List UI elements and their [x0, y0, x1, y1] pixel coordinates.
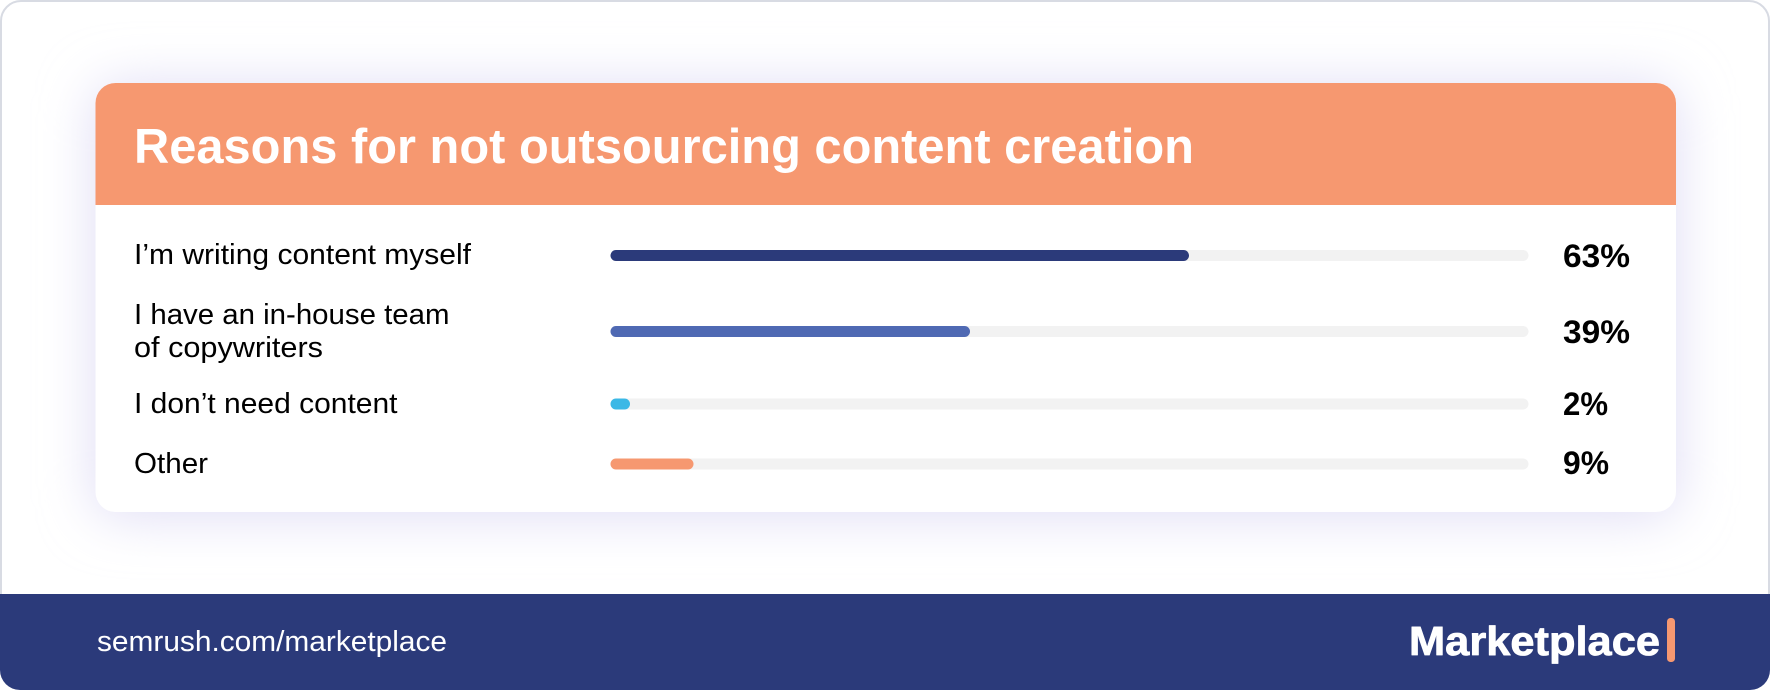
row: writing content myself: 63% — [1563, 238, 1630, 274]
footer band — [0, 594, 1770, 690]
panel: survey card — [96, 83, 1676, 512]
row: writing content myself — [134, 238, 1630, 274]
card shadow — [96, 86, 1676, 515]
header band — [96, 83, 1676, 205]
row: in-house team of copywriters: I have an in-house team — [134, 299, 450, 331]
row: in-house team of copywriters: 39% — [1563, 314, 1630, 350]
row: in-house team of copywriters — [134, 299, 1630, 364]
row: don't need content: 2% — [1563, 386, 1608, 422]
row: other — [134, 445, 1609, 481]
row: other: 9% — [1563, 445, 1609, 481]
footer url: semrush.com/marketplace — [97, 626, 447, 658]
row: don't need content — [134, 386, 1608, 422]
row: writing content myself: I’m writing content myself — [134, 239, 472, 271]
title: Reasons for not outsourcing content creation — [134, 120, 1194, 174]
brand logo: Marketplace: Marketplace — [1409, 618, 1660, 664]
row: don't need content: I don’t need content — [134, 388, 398, 420]
row: other: Other — [134, 448, 208, 480]
row: in-house team of copywriters: of copywriters — [134, 332, 323, 364]
